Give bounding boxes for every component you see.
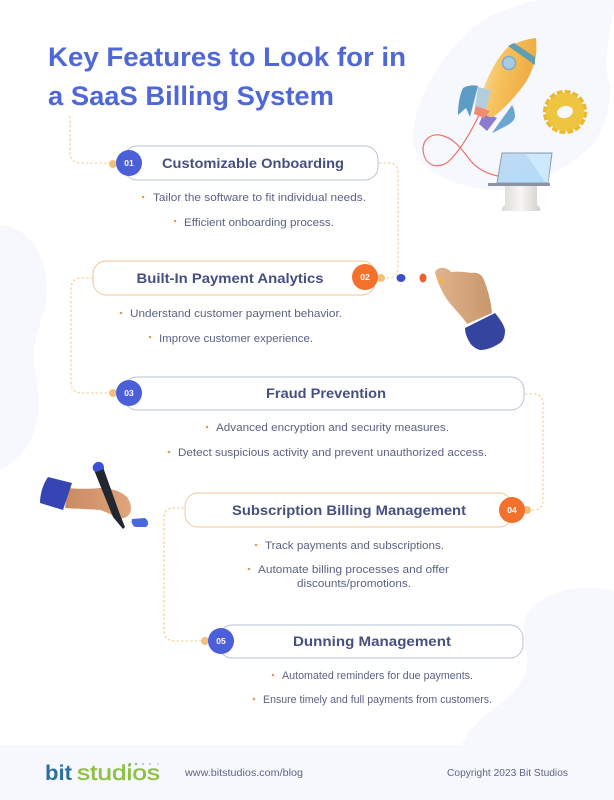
icon: blue dot	[396, 274, 406, 282]
title	[48, 42, 406, 111]
icon: marker	[94, 467, 125, 529]
background blob: bottom right	[462, 588, 614, 745]
heading box 02	[93, 261, 375, 295]
heading box 05	[219, 625, 523, 658]
icon: gear	[538, 85, 592, 139]
panel: step 02 built-in payment analytics	[93, 261, 385, 345]
footer	[0, 745, 614, 800]
number badge 05	[208, 628, 234, 654]
heading box 04	[185, 493, 512, 527]
connector: step 04 to step 05	[164, 508, 204, 641]
bullets 03	[168, 422, 487, 459]
footer url: www.bitstudios.com/blog	[184, 767, 303, 779]
connector: title to step 01	[70, 116, 112, 163]
marker dot 02	[377, 274, 385, 282]
bullets 04	[248, 540, 449, 590]
bullets 03: Advanced encryption and security measures.	[216, 422, 449, 434]
heading box 01	[124, 146, 378, 180]
bullets 03: Detect suspicious activity and prevent unauthorized access.	[178, 447, 487, 459]
connector: step 01 to step 02	[379, 163, 398, 278]
background blob: top right	[413, 0, 614, 190]
panel: step 01 customizable onboarding	[109, 146, 378, 229]
footer copyright: Copyright 2023 Bit Studios	[447, 767, 568, 779]
icon: cable	[423, 113, 498, 176]
icon: sleeve	[465, 313, 505, 350]
illustration: hand placing dots	[396, 268, 505, 350]
illustration: hand with marker	[40, 462, 148, 529]
bullets 05: Ensure timely and full payments from customers.	[263, 694, 492, 706]
bullets 01	[142, 192, 366, 229]
heading 01: Customizable Onboarding	[162, 155, 344, 171]
bullets 04: Automate billing processes and offer	[258, 564, 449, 576]
number badge 04	[499, 497, 525, 523]
background blob: left	[0, 225, 47, 470]
marker dot 01	[109, 160, 117, 168]
panel: step 03 fraud prevention: 03	[124, 388, 134, 398]
icon: marker cap	[132, 518, 148, 527]
bullets 05	[253, 670, 492, 706]
connector: step 02 to step 03	[71, 278, 114, 393]
logo	[45, 762, 160, 785]
bullets 02: Improve customer experience.	[159, 333, 313, 345]
bullets 01: Efficient onboarding process.	[184, 217, 334, 229]
marker dot 05	[201, 637, 209, 645]
bullets 02	[120, 308, 342, 345]
heading 05: Dunning Management	[293, 633, 451, 649]
logo: bit	[45, 762, 72, 785]
footer band	[0, 745, 614, 800]
heading 03: Fraud Prevention	[266, 385, 386, 401]
marker dot 03	[109, 389, 117, 397]
heading box 03	[124, 377, 524, 410]
number badge 02	[352, 264, 378, 290]
icon: rocket	[458, 38, 536, 133]
marker dot 04	[523, 506, 531, 514]
heading 02: Built-In Payment Analytics	[136, 270, 324, 286]
title: Key Features to Look for in	[48, 42, 406, 72]
panel: step 03 fraud prevention	[109, 377, 524, 459]
icon: red dot	[420, 274, 426, 282]
connector: step 03 to step 04	[525, 394, 543, 510]
bullets 05: Automated reminders for due payments.	[282, 670, 473, 682]
number badge 01	[116, 150, 142, 176]
panel: step 01 customizable onboarding: 01	[124, 158, 134, 168]
illustration: rocket, gear and laptop	[423, 38, 592, 211]
panel: step 05 dunning management	[201, 625, 523, 706]
bullets 04: Track payments and subscriptions.	[265, 540, 444, 552]
number badge 03	[116, 380, 142, 406]
title: a SaaS Billing System	[48, 81, 334, 111]
bullets 01: Tailor the software to fit individual needs.	[153, 192, 366, 204]
icon: sleeve	[40, 477, 72, 510]
panel: step 02 built-in payment analytics: 02	[360, 272, 370, 282]
logo: studios	[77, 762, 160, 785]
icon: hand	[65, 488, 131, 518]
bullets 04: discounts/promotions.	[297, 578, 411, 590]
heading 04: Subscription Billing Management	[232, 502, 466, 518]
icon: laptop on pedestal	[488, 153, 552, 211]
icon: hand	[435, 268, 492, 324]
panel: step 05 dunning management: 05	[216, 636, 226, 646]
bullets 02: Understand customer payment behavior.	[130, 308, 342, 320]
panel: step 04 subscription billing management: 04	[507, 505, 517, 515]
panel: step 04 subscription billing management	[185, 493, 531, 590]
